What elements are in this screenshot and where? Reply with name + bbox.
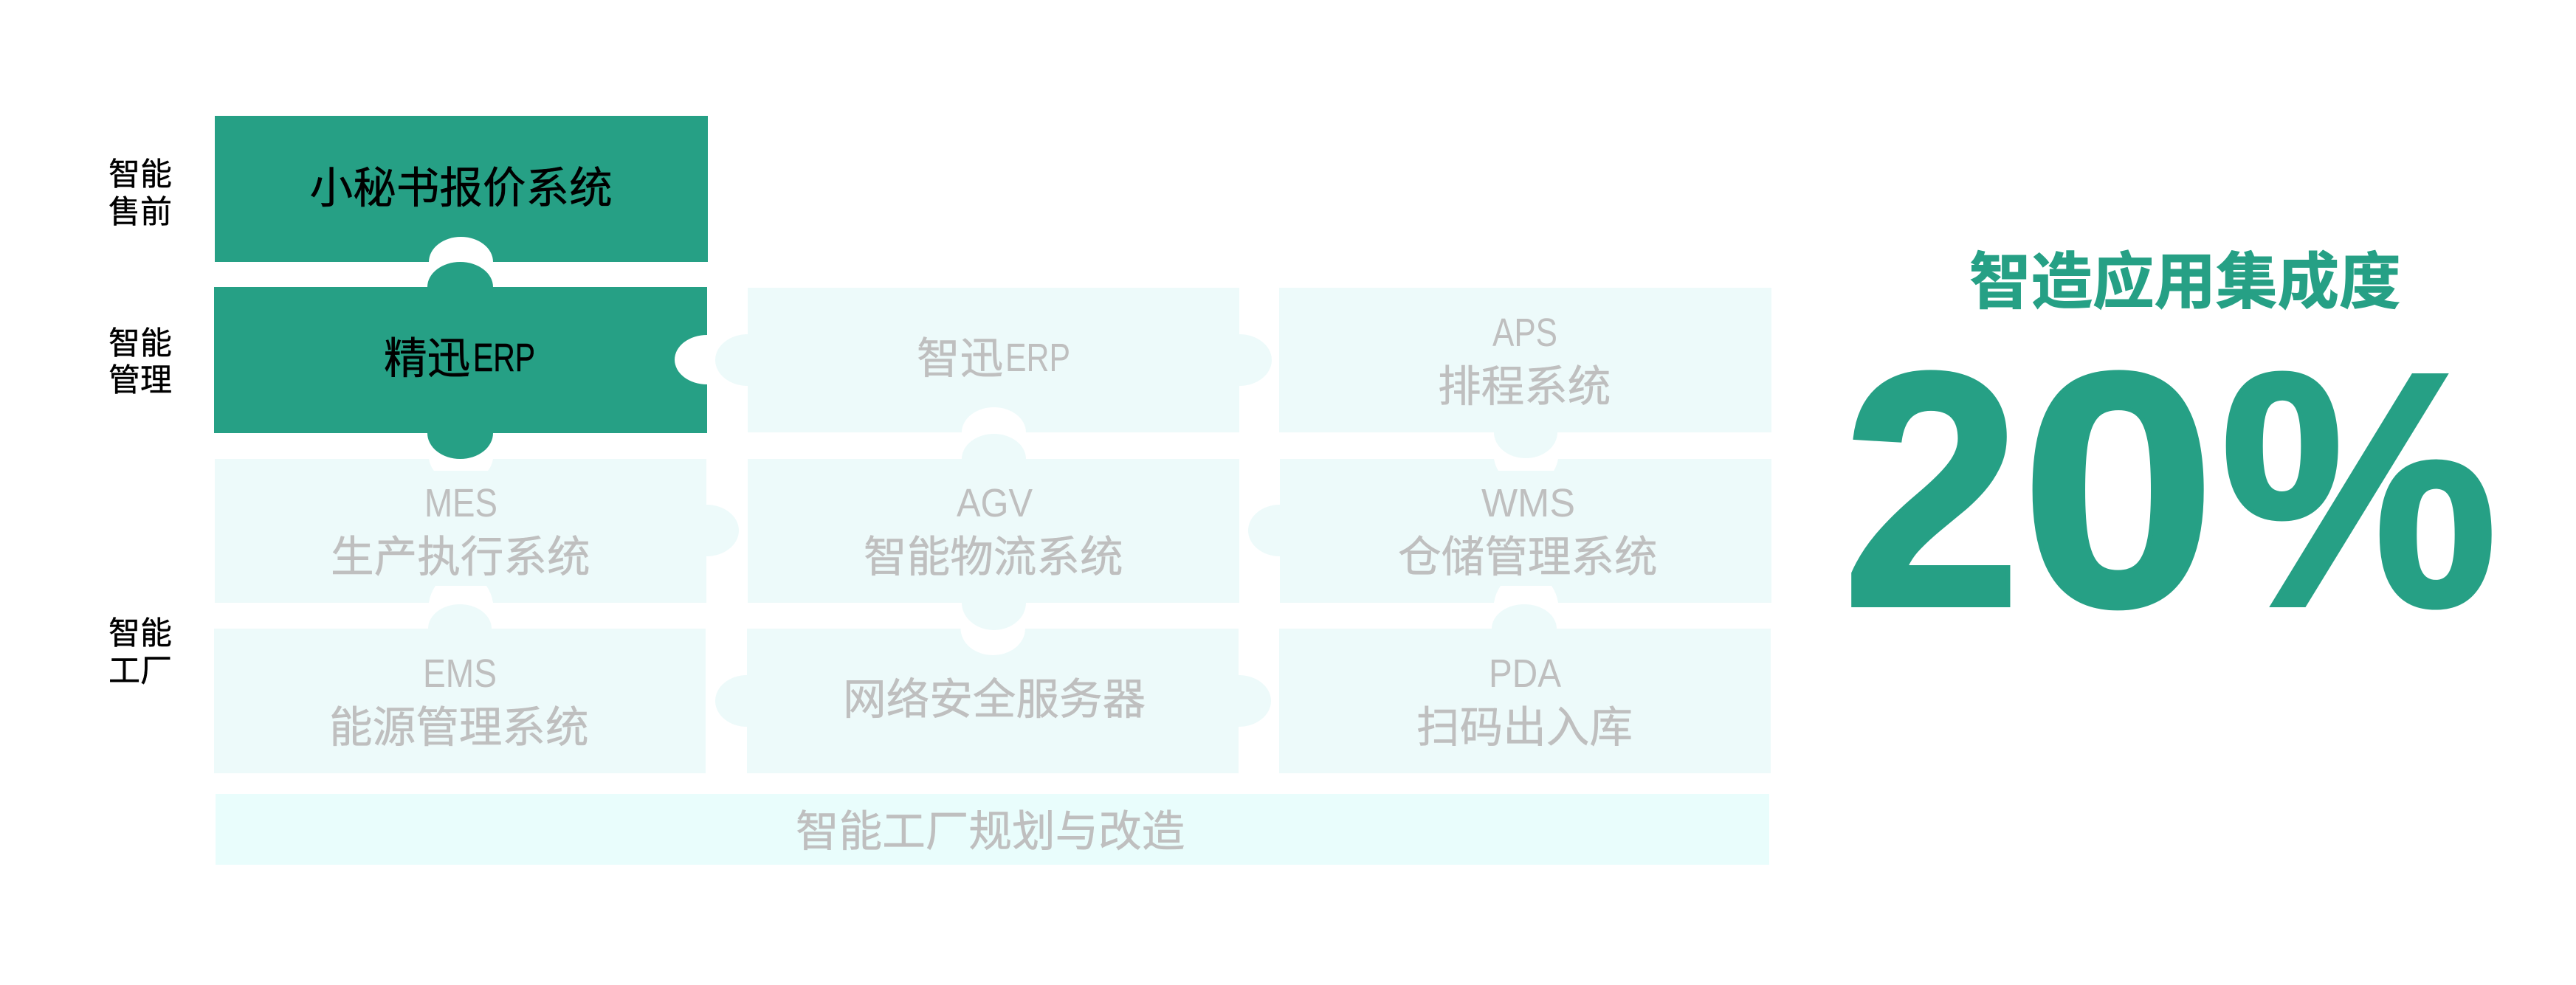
panel: WMS 仓储管理系统: WMS xyxy=(1481,481,1575,525)
panel: 小秘书报价系统: 小秘书报价系统 xyxy=(310,165,613,212)
heading: 智造应用集成度: 智造应用集成度 xyxy=(1969,247,2400,317)
label: 智能售前: 售前 xyxy=(109,195,172,230)
big number: 20%: 2 xyxy=(1842,303,2021,676)
panel: APS 排程系统: APS xyxy=(1492,311,1557,355)
panel: 智迅ERP: 智迅 xyxy=(917,335,1003,383)
panel: APS 排程系统: 排程系统 xyxy=(1438,363,1611,411)
panel: WMS 仓储管理系统 xyxy=(1248,459,1771,603)
panel: PDA 扫码出入库: 扫码出入库 xyxy=(1416,704,1633,752)
label: 智能售前 xyxy=(109,157,172,230)
label: 智能工厂: 工厂 xyxy=(109,654,172,689)
panel: MES 生产执行系统: MES xyxy=(424,481,497,525)
panel: 智能工厂规划与改造 xyxy=(216,794,1769,865)
big number: 20% xyxy=(1842,303,2498,676)
label: 智能管理 xyxy=(109,326,172,398)
panel: WMS 仓储管理系统: 仓储管理系统 xyxy=(1398,533,1658,581)
panel: 网络安全服务器: 网络安全服务器 xyxy=(843,676,1146,724)
label: 智能管理: 智能 xyxy=(109,326,172,362)
panel: AGV 智能物流系统: AGV xyxy=(957,481,1033,525)
panel: AGV 智能物流系统 xyxy=(748,434,1239,630)
label: 智能工厂: 智能 xyxy=(109,616,172,652)
panel: 精迅ERP: ERP xyxy=(473,336,535,380)
label: 智能工厂 xyxy=(109,616,172,689)
panel: AGV 智能物流系统: 智能物流系统 xyxy=(864,533,1123,581)
label: 智能管理: 管理 xyxy=(109,363,172,398)
panel: EMS 能源管理系统 xyxy=(214,604,706,773)
panel: APS 排程系统 xyxy=(1279,288,1771,458)
big number: 20%: % xyxy=(2220,303,2498,676)
panel: MES 生产执行系统 xyxy=(215,459,739,603)
panel: MES 生产执行系统: 生产执行系统 xyxy=(331,533,590,581)
label: 智能售前: 智能 xyxy=(109,157,172,193)
panel: EMS 能源管理系统: EMS xyxy=(423,652,497,696)
panel: 网络安全服务器 xyxy=(715,629,1271,773)
panel: PDA 扫码出入库 xyxy=(1279,604,1771,773)
big number: 20%: 0 xyxy=(2021,303,2216,676)
panel: 精迅ERP xyxy=(214,262,707,459)
panel: EMS 能源管理系统: 能源管理系统 xyxy=(329,704,589,752)
panel: 智能工厂规划与改造: 智能工厂规划与改造 xyxy=(796,808,1185,856)
panel: 智迅ERP: ERP xyxy=(1005,336,1070,380)
panel: 智迅ERP xyxy=(715,288,1272,432)
panel: PDA 扫码出入库: PDA xyxy=(1489,652,1561,696)
panel: 小秘书报价系统 xyxy=(215,116,708,262)
panel: 精迅ERP: 精迅 xyxy=(384,335,470,383)
